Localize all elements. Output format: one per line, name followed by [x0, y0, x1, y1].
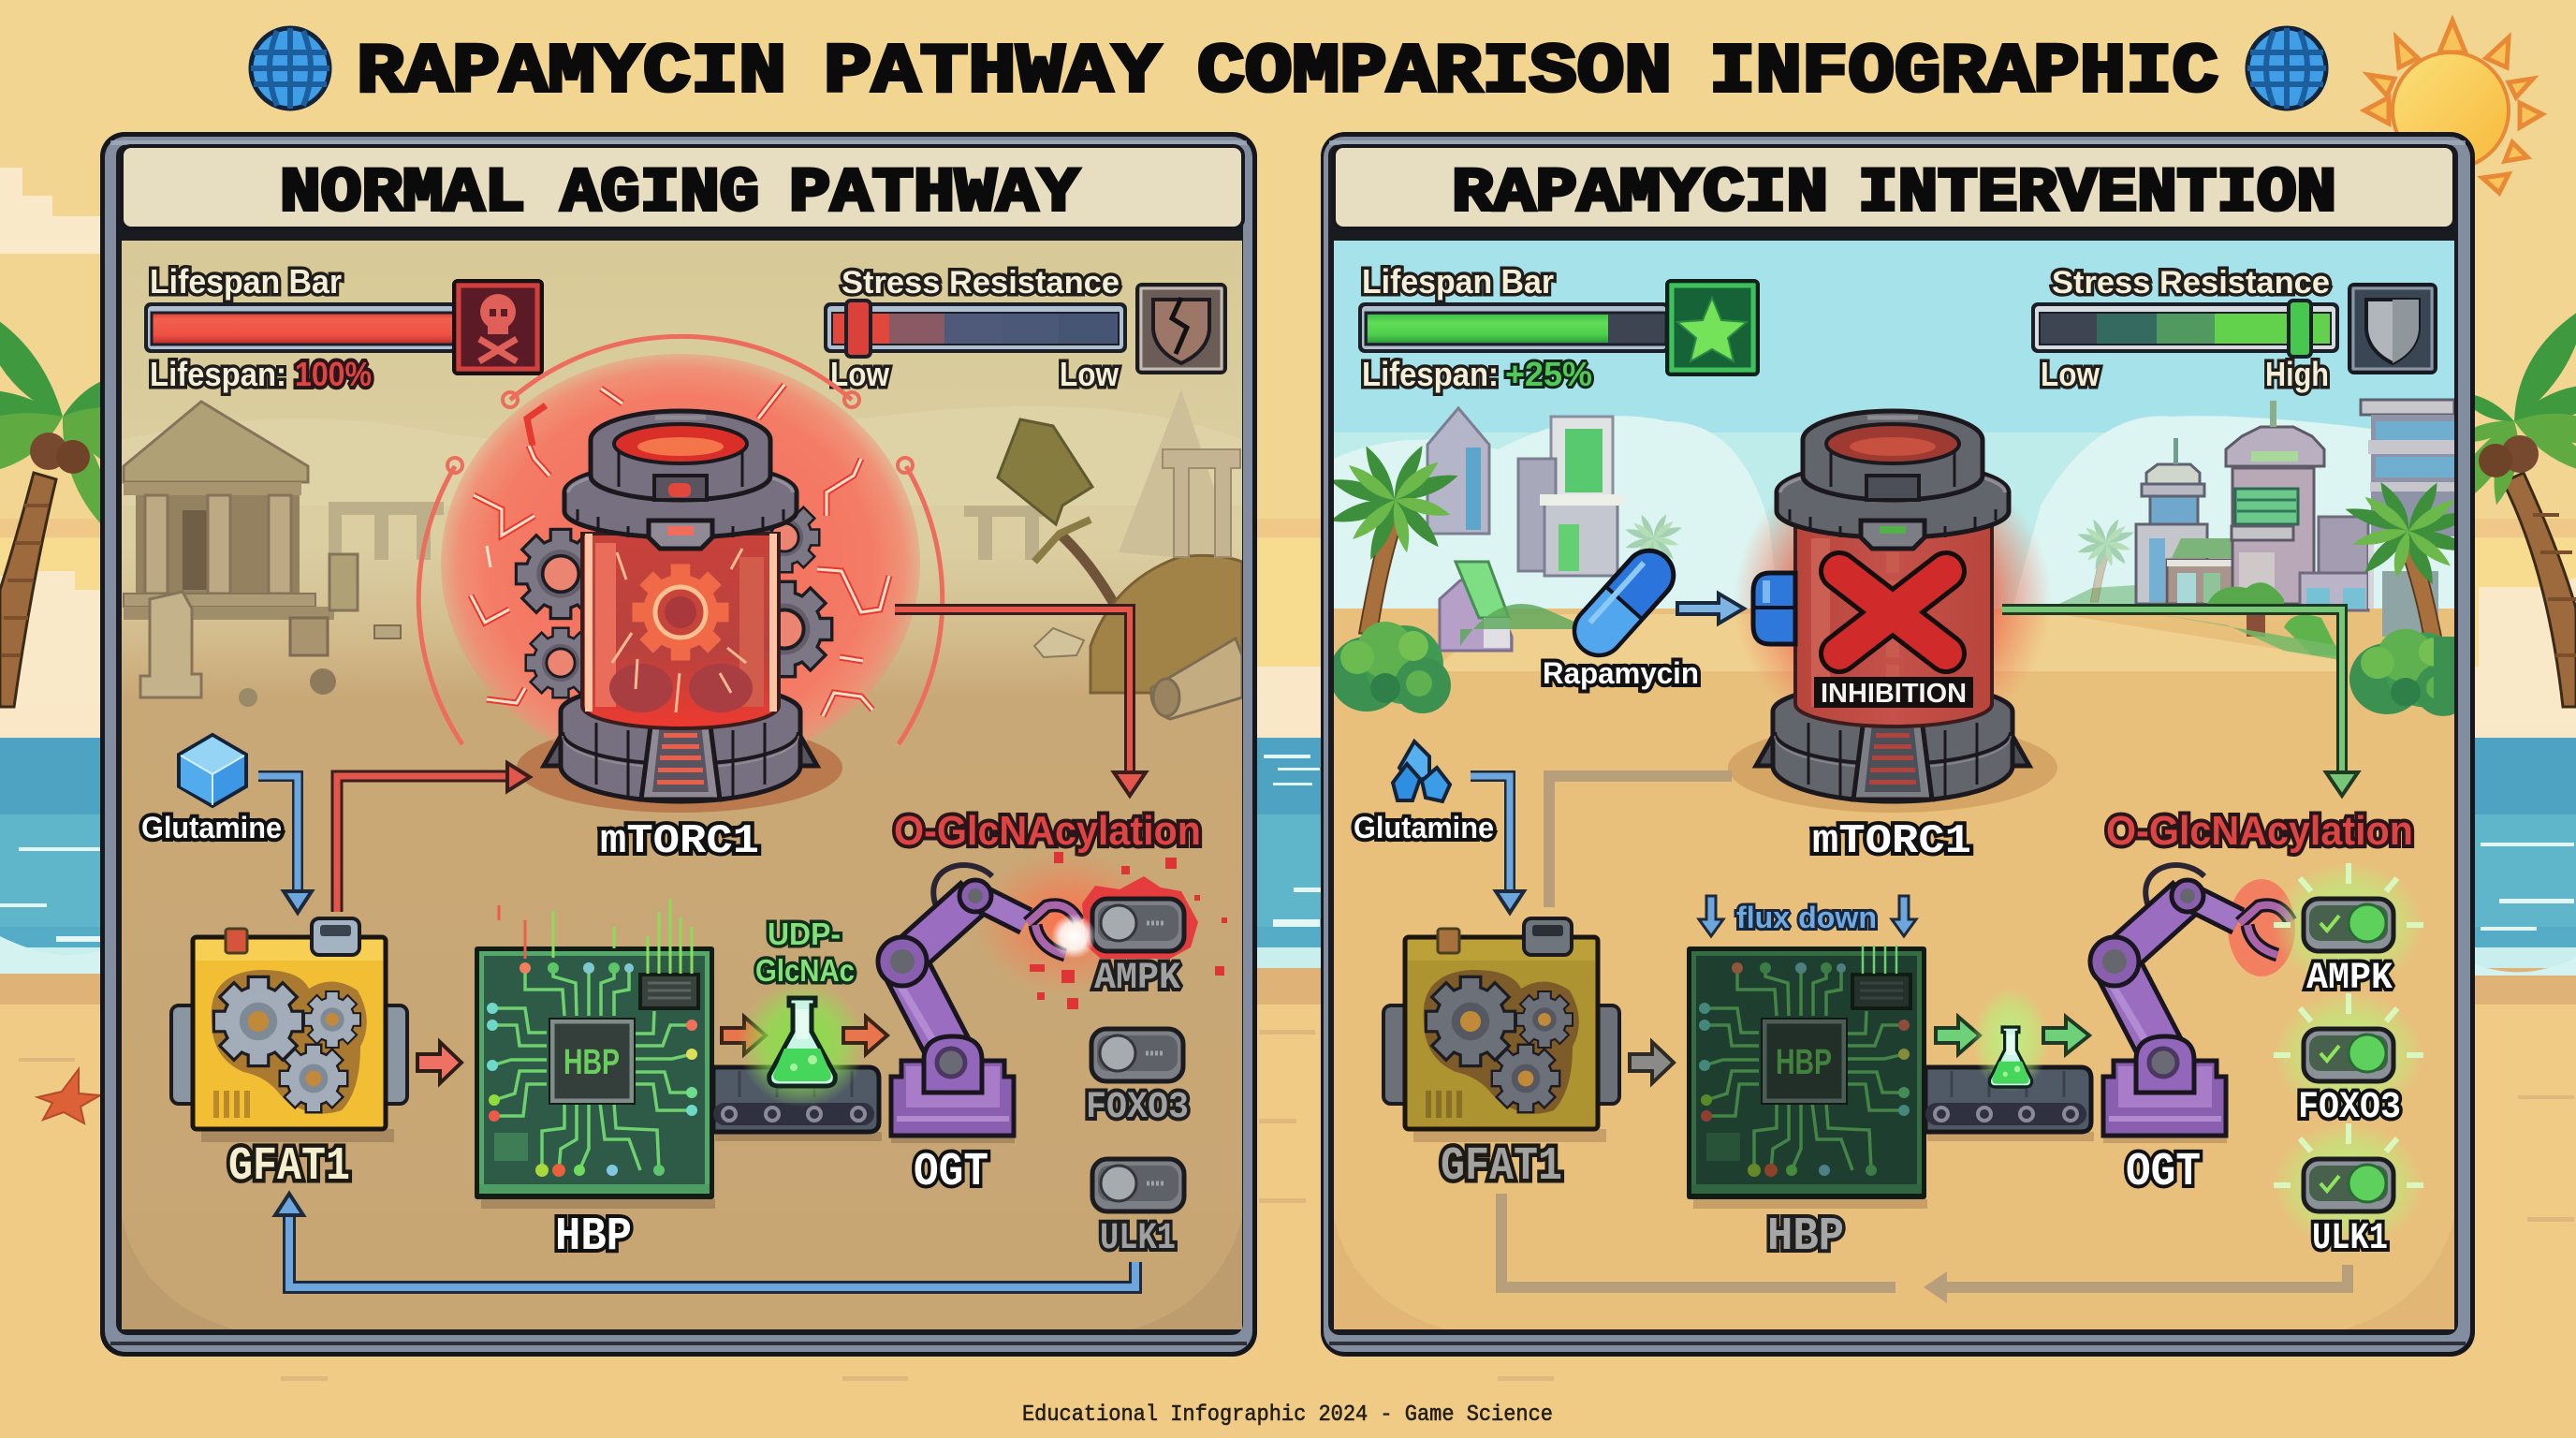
heading: PATHWAY: [789, 158, 1079, 228]
soft red halo: [1734, 449, 2052, 749]
label: GFAT1: GFAT1: [1441, 1140, 1562, 1194]
panel: rapamycin intervention: [1321, 132, 2476, 1357]
arrow: GFAT1 to mTORC1: [337, 763, 530, 912]
label: ULK1: ULK1: [1100, 1218, 1176, 1260]
label: lifespan value: Lifespan:: [1362, 355, 1499, 393]
horizon band: [0, 519, 2576, 537]
label: rapamycin: Rapamycin: [1543, 656, 1699, 690]
broken column: [140, 592, 201, 697]
glass chamber: [582, 534, 779, 728]
panel frame: [1321, 132, 2475, 1357]
label: low: Low: [2041, 355, 2100, 393]
icon: inhibition X: [1839, 571, 1946, 653]
heading: AGING: [561, 158, 759, 228]
label: inhibition: INHIBITION: [1821, 679, 1967, 709]
dead palm: [1060, 534, 1117, 609]
arrow: UDP-GlcNAc to OGT: [843, 1017, 887, 1054]
label: ULK1: ULK1: [2312, 1218, 2388, 1260]
slider handle: [846, 301, 871, 357]
label: mTORC1: mTORC1: [600, 818, 759, 865]
panel: normal aging pathway: [100, 132, 1257, 1357]
title text: COMPARISON: [1197, 34, 1672, 112]
scene: ancient ruins: [122, 241, 1242, 1329]
arrow: muted GFAT1 to mTORC1: [1549, 776, 1732, 907]
label: stress resistance: Stress Resistance: [842, 265, 1120, 301]
heading: [280, 158, 1079, 228]
ULK1 switch: off: [1092, 1159, 1184, 1211]
icon: glutamine cube: [179, 735, 246, 806]
label: lifespan bar: Lifespan Bar: [1362, 262, 1554, 301]
stress resistance gauge: low: [824, 265, 1225, 393]
arrow: mTORC1 to O-GlcNAcylation: [895, 609, 1146, 796]
outer gears: [518, 504, 830, 697]
arrow: mTORC1 to O-GlcNAcylation: [2002, 609, 2358, 796]
OGT robot arm: [2090, 865, 2295, 1143]
label: lifespan value: Lifespan:: [150, 355, 286, 393]
conveyor belt: [713, 1067, 882, 1141]
title: [251, 28, 2326, 112]
heading: NORMAL: [280, 158, 525, 228]
flux down label: [1699, 896, 1916, 936]
temple: [136, 492, 300, 599]
red energy field: [418, 336, 943, 813]
arrow: GFAT1 to HBP: [417, 1042, 461, 1083]
label: UDP-GlcNAc: [755, 917, 855, 988]
title text: INFOGRAPHIC: [1709, 34, 2218, 112]
arrow: rapamycin to mTORC1: [1677, 594, 1744, 624]
label: mTORC1: mTORC1: [1812, 818, 1971, 865]
FOXO3 switch: on: [2272, 991, 2425, 1119]
heading: INTERVENTION: [1858, 158, 2336, 228]
label: O-GlcNAcylation: O-GlcNAcylation: [2106, 808, 2413, 854]
label: UDP-GlcNAc: UDP-: [768, 917, 841, 951]
log: [1151, 638, 1242, 719]
label: UDP-GlcNAc: GlcNAc: [755, 953, 855, 988]
arrow: GFAT1 to HBP: [1630, 1042, 1674, 1083]
impact glow: [973, 849, 1161, 995]
label: glutamine: Glutamine: [1354, 811, 1494, 844]
label: low: Low: [830, 355, 890, 393]
arrow: muted feedback: [1501, 1194, 2348, 1303]
label: AMPK: AMPK: [2306, 958, 2393, 1000]
left down arrow: [1699, 896, 1723, 936]
left palm tree: [0, 297, 156, 707]
label: FOXO3: FOXO3: [1086, 1087, 1189, 1129]
corner marks: [122, 1217, 1242, 1329]
label: O-GlcNAcylation: O-GlcNAcylation: [894, 808, 1201, 854]
arrow: glutamine to GFAT1: [258, 776, 312, 913]
header plate: [1334, 146, 2454, 228]
footer credit: Educational Infographic 2024 - Game Science: [1022, 1402, 1553, 1428]
label: HBP: HBP: [555, 1211, 632, 1264]
arrow: HBP to flask: [1936, 1017, 1980, 1054]
icon: left globe: [251, 28, 329, 109]
label: AMPK: AMPK: [1094, 958, 1180, 1000]
icon: silver shield: [2349, 285, 2436, 373]
title text: PATHWAY: [824, 34, 1162, 112]
FOXO3 switch: off: [1091, 1029, 1183, 1081]
sun: [2364, 21, 2542, 193]
right palm tree: [2434, 299, 2576, 707]
label: low end: Low: [1060, 355, 1120, 393]
ULK1 switch: on: [2272, 1122, 2425, 1249]
label: lifespan bar: Lifespan Bar: [150, 262, 342, 301]
red burst: [1082, 876, 1198, 959]
corner marks: [1334, 1217, 2454, 1329]
text: flux down: flux down: [1736, 901, 1877, 934]
GFAT1 machine: dimmed: [1383, 918, 1619, 1142]
AMPK switch: on: [2272, 861, 2425, 989]
label: FOXO3: FOXO3: [2298, 1087, 2401, 1129]
label: OGT: OGT: [914, 1146, 988, 1199]
HBP circuit board: dimmed: [1687, 946, 1927, 1209]
icon: skull: [454, 281, 542, 374]
label: glutamine: Glutamine: [141, 811, 282, 844]
lifespan gauge: red: [144, 262, 542, 393]
right buildings: [2059, 585, 2136, 604]
red glow at claw: [2228, 879, 2295, 976]
HBP circuit board: [475, 899, 715, 1209]
scene: futuristic beach city: [1327, 241, 2476, 1329]
value: 100%: 100%: [295, 355, 372, 393]
title text: [357, 34, 2218, 112]
icon: rapamycin capsule: [1565, 541, 1683, 665]
heading: [1452, 158, 2336, 228]
slider handle: [2289, 301, 2311, 357]
icon: docked capsule: [1753, 573, 1795, 644]
lifespan gauge: green: [1358, 262, 1758, 393]
label: OGT: OGT: [2126, 1146, 2201, 1199]
arrow: glutamine to GFAT1: [1471, 776, 1524, 913]
mTORC1 reactor: overactive: [418, 336, 943, 813]
icon: star: [1667, 281, 1758, 374]
stress resistance gauge: high: [2031, 265, 2436, 393]
icon: glutamine crystals: [1393, 741, 1450, 801]
label: high: High: [2265, 355, 2329, 393]
icon: right globe: [2247, 28, 2326, 109]
mound: [1090, 555, 1242, 693]
arrow: flask to OGT: [2043, 1017, 2089, 1054]
GFAT1 machine: [171, 918, 407, 1142]
header plate: [122, 146, 1243, 228]
label: GFAT1: GFAT1: [228, 1140, 350, 1194]
arrow: feedback to GFAT1: [275, 1194, 1135, 1287]
conveyor belt: [1925, 1067, 2094, 1141]
OGT robot arm: [878, 849, 1161, 1143]
icon: small flask: [1971, 987, 2050, 1092]
heading: RAPAMYCIN: [1452, 158, 1828, 228]
AMPK switch: blocked: [1030, 852, 1227, 1009]
label: stress resistance: Stress Resistance: [2052, 265, 2330, 301]
starfish: [37, 1069, 100, 1123]
clouds: [0, 168, 2576, 727]
icon: cracked shield: [1137, 285, 1225, 373]
arrow: HBP to UDP-GlcNAc: [722, 1017, 766, 1054]
glass chamber: [1795, 524, 1992, 726]
panel contents: [1354, 262, 2436, 1303]
value: +25%: +25%: [1505, 355, 1592, 393]
icon: UDP-GlcNAc flask: [739, 980, 866, 1108]
rock: [1034, 628, 1084, 657]
far ruin: [1163, 449, 1240, 557]
right down arrow: [1892, 896, 1916, 936]
mTORC1 reactor: inhibited: [1728, 411, 2057, 813]
title text: RAPAMYCIN: [357, 34, 786, 112]
left buildings: [1427, 408, 1489, 534]
label: HBP: HBP: [1767, 1211, 1844, 1264]
panel frame: [100, 132, 1257, 1357]
